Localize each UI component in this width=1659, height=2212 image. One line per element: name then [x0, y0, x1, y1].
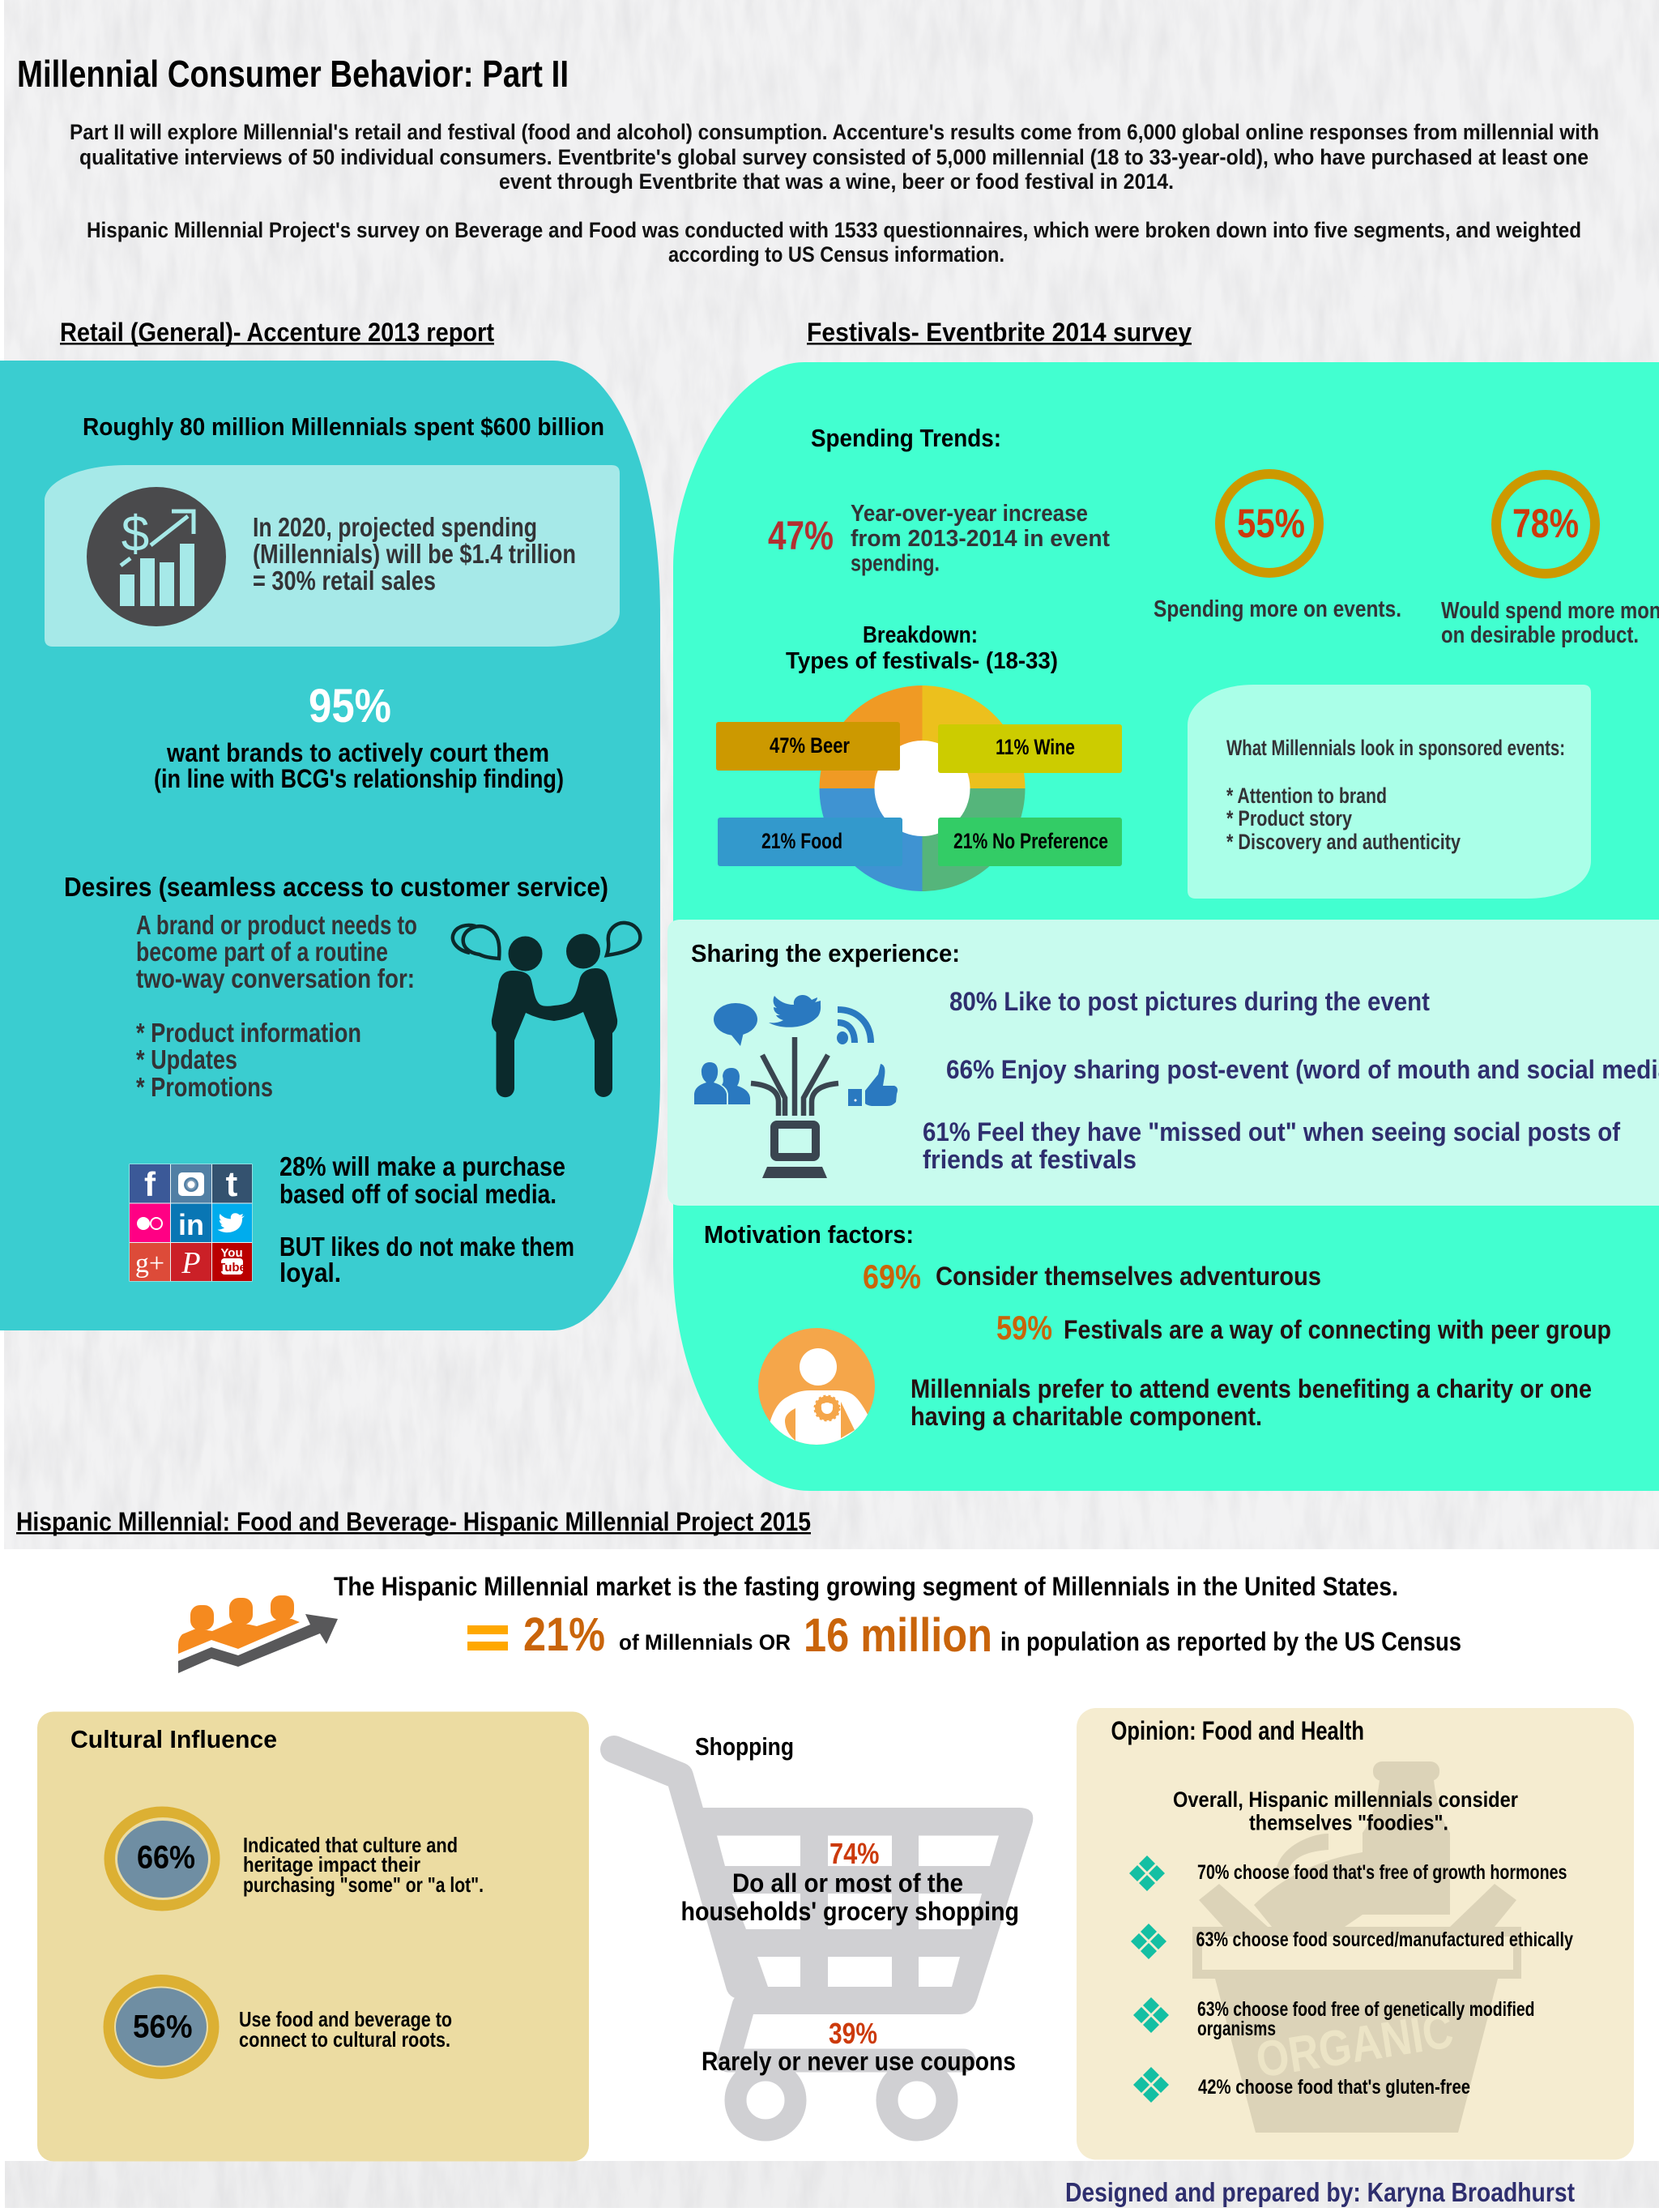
heading: sharing: Sharing the experience: — [691, 939, 960, 967]
stat: 69%: Consider themselves adventurous — [936, 1262, 1321, 1291]
heading: spending trends: Spending Trends: — [811, 424, 1001, 452]
icon: social media grid: g+ — [135, 1249, 164, 1279]
sharing stats: 61% Feel they have "missed out" when seeing social posts of — [923, 1117, 1620, 1147]
intro text block: according to US Census information. — [668, 242, 1004, 267]
desires text: * Updates — [136, 1044, 237, 1074]
diet stat 3 — [1197, 1998, 1534, 2040]
hispanic market statement: in population as reported by the US Census — [1000, 1627, 1461, 1656]
projected spending text: In 2020, projected spending — [253, 512, 537, 542]
text: culture and heritage: heritage impact their — [243, 1852, 420, 1877]
stat: 59%: Festivals are a way of connecting with peer group — [1064, 1315, 1611, 1344]
social media text: loyal. — [279, 1258, 341, 1287]
projected spending text: = 30% retail sales — [253, 566, 436, 596]
heading: opinion: Opinion: Food and Health — [1111, 1716, 1364, 1745]
diet stat 4: 42% choose food that's gluten-free — [1198, 2076, 1470, 2099]
icon: shopping cart watermark — [614, 1749, 1033, 2130]
desires text: two-way conversation for: — [136, 963, 415, 993]
icon: organic basket watermark — [1192, 1761, 1521, 2133]
charity text — [911, 1374, 1592, 1431]
desires text — [136, 910, 417, 1102]
band: sharing the experience — [667, 920, 1659, 1206]
stat: 39%: 39% — [829, 2017, 877, 2050]
stat: 69%: 69% — [863, 1258, 921, 1296]
icon: people shaking hands — [453, 923, 640, 1097]
diet stat 3: 63% choose food free of genetically modified — [1197, 1998, 1534, 2021]
stat ring: 55% — [1154, 474, 1401, 622]
text: cultural roots — [239, 2007, 452, 2052]
stat: 47%: spending. — [851, 551, 940, 577]
foodies statement: Overall, Hispanic millennials consider — [1173, 1787, 1518, 1812]
icon: social media grid: t — [226, 1164, 238, 1204]
stat: 74% — [680, 1837, 1019, 1926]
stat: 95%: (in line with BCG's relationship finding) — [154, 764, 564, 793]
hispanic market statement: 21% — [523, 1608, 605, 1661]
badge: sun heart — [815, 1396, 839, 1420]
heading: hispanic section: Hispanic Millennial: Food and Beverage- Hispanic Millennial Project 2015 — [16, 1507, 811, 1536]
callout: sponsored events: * Discovery and authenticity — [1226, 830, 1461, 854]
chart: festival types donut: 21% No Preference — [953, 829, 1108, 853]
heading: motivation factors: Motivation factors: — [704, 1220, 914, 1249]
intro text block: event through Eventbrite that was a wine, beer or food festival in 2014. — [499, 169, 1174, 194]
panel: cultural influence — [37, 1711, 589, 2162]
hispanic market statement: of Millennials OR — [619, 1630, 791, 1655]
panel: festivals — [667, 362, 1659, 1491]
panel: shopping — [614, 1732, 1033, 2130]
text: cultural roots: Use food and beverage to — [239, 2007, 452, 2031]
chart: festival types donut — [716, 685, 1122, 891]
title: Millennial Consumer Behavior: Part II — [17, 53, 569, 95]
hispanic market statement: 16 million — [804, 1609, 992, 1662]
icon: social media grid — [130, 1164, 253, 1282]
sharing stats: friends at festivals — [923, 1145, 1137, 1174]
callout: sponsored events: * Attention to brand — [1226, 784, 1387, 808]
icon: social media grid: f — [144, 1165, 156, 1203]
sharing stats — [923, 987, 1659, 1174]
stat: 95% — [154, 680, 564, 793]
stat: 59% — [996, 1309, 1611, 1347]
desires text: * Product information — [136, 1018, 361, 1048]
heading: retail section: Retail (General)- Accenture 2013 report — [60, 318, 494, 347]
diet stat 1: 70% choose food that's free of growth hormones — [1197, 1861, 1567, 1884]
text: cultural roots: connect to cultural roots. — [239, 2027, 450, 2052]
icon: organic basket watermark: ORGANIC — [1252, 2002, 1457, 2089]
social media text: BUT likes do not make them — [279, 1232, 574, 1262]
charity text: Millennials prefer to attend events benefiting a charity or one — [911, 1374, 1592, 1403]
stat ring: 66% — [104, 1807, 220, 1911]
heading: breakdown — [786, 622, 1058, 674]
text: culture and heritage: Indicated that culture and — [243, 1833, 458, 1857]
panel: opinion on food and health — [1077, 1708, 1634, 2160]
desires text: * Promotions — [136, 1072, 273, 1102]
foodies statement — [1173, 1787, 1518, 1835]
stat: 95%: want brands to actively court them — [166, 738, 549, 767]
icon: social media grid: P — [181, 1246, 201, 1280]
text: culture and heritage — [243, 1833, 484, 1897]
callout: sponsored events — [1188, 685, 1591, 899]
icon: money chart — [87, 487, 226, 626]
chart: festival types donut: 11% Wine — [996, 735, 1075, 759]
heading: cultural influence: Cultural Influence — [70, 1725, 277, 1753]
hispanic market statement: The Hispanic Millennial market is the fasting growing segment of Millennials in the United States. — [334, 1572, 1398, 1601]
diet stat 3: organisms — [1197, 2018, 1276, 2040]
desires text: A brand or product needs to — [136, 910, 417, 940]
icon: diamond bullet 3 — [1133, 1997, 1169, 2033]
text: culture and heritage: purchasing "some" or "a lot". — [243, 1873, 484, 1897]
heading: breakdown: Breakdown: — [863, 622, 978, 648]
icon: diamond bullet 4 — [1133, 2067, 1169, 2103]
stat: 74%: 74% — [830, 1837, 880, 1870]
callout: sponsored events: * Product story — [1226, 806, 1352, 831]
icon: money chart: $ — [122, 506, 149, 562]
icon: social media grid: You — [220, 1246, 243, 1260]
chart: festival types donut: 21% Food — [761, 829, 842, 853]
heading: breakdown: Types of festivals- (18-33) — [786, 648, 1058, 674]
heading: 80 million: Roughly 80 million Millennials spent $600 billion — [83, 412, 604, 441]
stat: 74%: households' grocery shopping — [680, 1897, 1019, 1926]
stat: 47%: from 2013-2014 in event — [851, 526, 1110, 552]
stat ring: 78% — [1441, 475, 1659, 648]
icon: social network computer — [694, 995, 898, 1178]
icon: growing group arrow — [178, 1595, 338, 1673]
footer credit: Designed and prepared by: Karyna Broadhurst — [1065, 2177, 1575, 2207]
stat: 39%: Rarely or never use coupons — [702, 2047, 1016, 2076]
stat: 69% — [863, 1258, 1321, 1296]
panel: retail — [0, 361, 660, 1330]
icon: charity person — [758, 1328, 883, 1446]
intro text block — [70, 120, 1599, 267]
social media text: based off of social media. — [279, 1179, 557, 1209]
stat ring: 55%: 55% — [1237, 501, 1305, 546]
stat ring: 66%: 66% — [137, 1839, 195, 1875]
stat ring: 56%: 56% — [133, 2009, 193, 2045]
heading: festivals section: Festivals- Eventbrite 2014 survey — [807, 318, 1192, 347]
stat: 47%: Year-over-year increase — [851, 501, 1088, 527]
heading: shopping: Shopping — [695, 1732, 794, 1761]
desires text: become part of a routine — [136, 937, 388, 967]
stat ring: 78%: 78% — [1512, 501, 1579, 546]
stat ring: 56% — [104, 1975, 219, 2079]
sharing stats: 80% Like to post pictures during the event — [949, 987, 1430, 1016]
callout: projected spending — [45, 465, 620, 647]
diet stat 2: 63% choose food sourced/manufactured ethically — [1196, 1928, 1573, 1951]
hispanic market statement — [334, 1572, 1461, 1662]
projected spending text: (Millennials) will be $1.4 trillion — [253, 539, 576, 569]
projected spending text — [253, 512, 576, 596]
icon: social media grid: Tube — [218, 1261, 246, 1275]
stat: 47% — [768, 501, 1110, 577]
foodies statement: themselves "foodies". — [1249, 1811, 1448, 1835]
heading: desires: Desires (seamless access to customer service) — [64, 872, 608, 902]
stat: 39% — [702, 2017, 1016, 2076]
icon: diamond bullet 1 — [1129, 1855, 1165, 1891]
social media text: 28% will make a purchase — [279, 1151, 565, 1181]
icon: diamond bullet 2 — [1131, 1924, 1166, 1959]
charity text: having a charitable component. — [911, 1402, 1262, 1431]
stat: 59%: 59% — [996, 1309, 1052, 1347]
stat: 47%: 47% — [768, 513, 834, 558]
social media text — [279, 1151, 574, 1287]
stat: 74%: Do all or most of the — [732, 1868, 963, 1898]
icon: social media grid: in — [178, 1208, 204, 1241]
chart: festival types donut: 47% Beer — [770, 733, 850, 758]
stat: 95%: 95% — [309, 680, 391, 732]
stat ring: 55%: Spending more on events. — [1154, 596, 1401, 622]
